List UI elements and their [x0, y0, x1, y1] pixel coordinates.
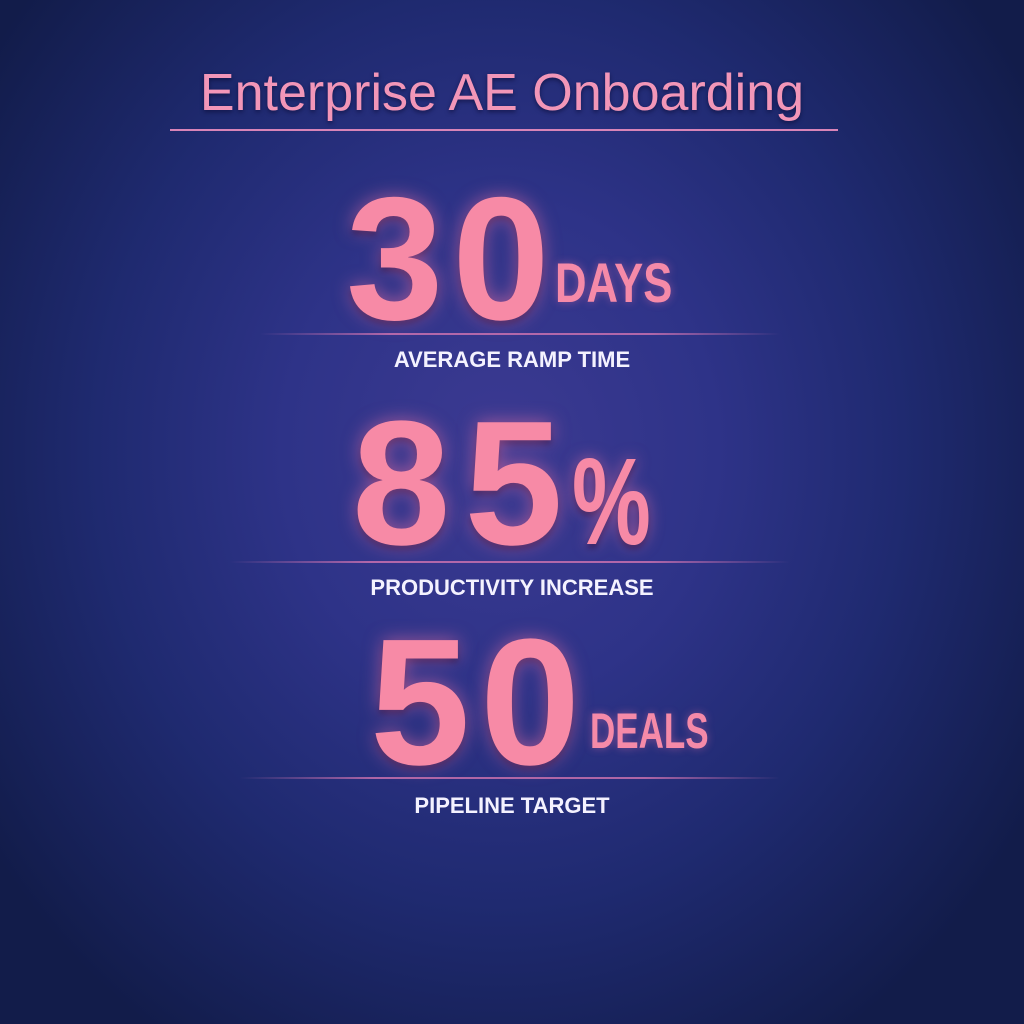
number 30: 30 [346, 162, 559, 357]
label: PIPELINE TARGET [414, 793, 610, 818]
label: PRODUCTIVITY INCREASE [370, 575, 654, 600]
percent sign: % [572, 434, 651, 571]
unit days: DAYS [555, 251, 672, 314]
title: Enterprise AE Onboarding [200, 64, 804, 122]
label: AVERAGE RAMP TIME [394, 347, 630, 372]
number 85: 85 [352, 384, 577, 582]
unit deals: DEALS [590, 703, 709, 759]
stat: 50 deals [248, 602, 772, 818]
stat: 85% [238, 384, 782, 600]
number 50: 50 [370, 602, 590, 803]
stat: 30 days [268, 162, 772, 372]
